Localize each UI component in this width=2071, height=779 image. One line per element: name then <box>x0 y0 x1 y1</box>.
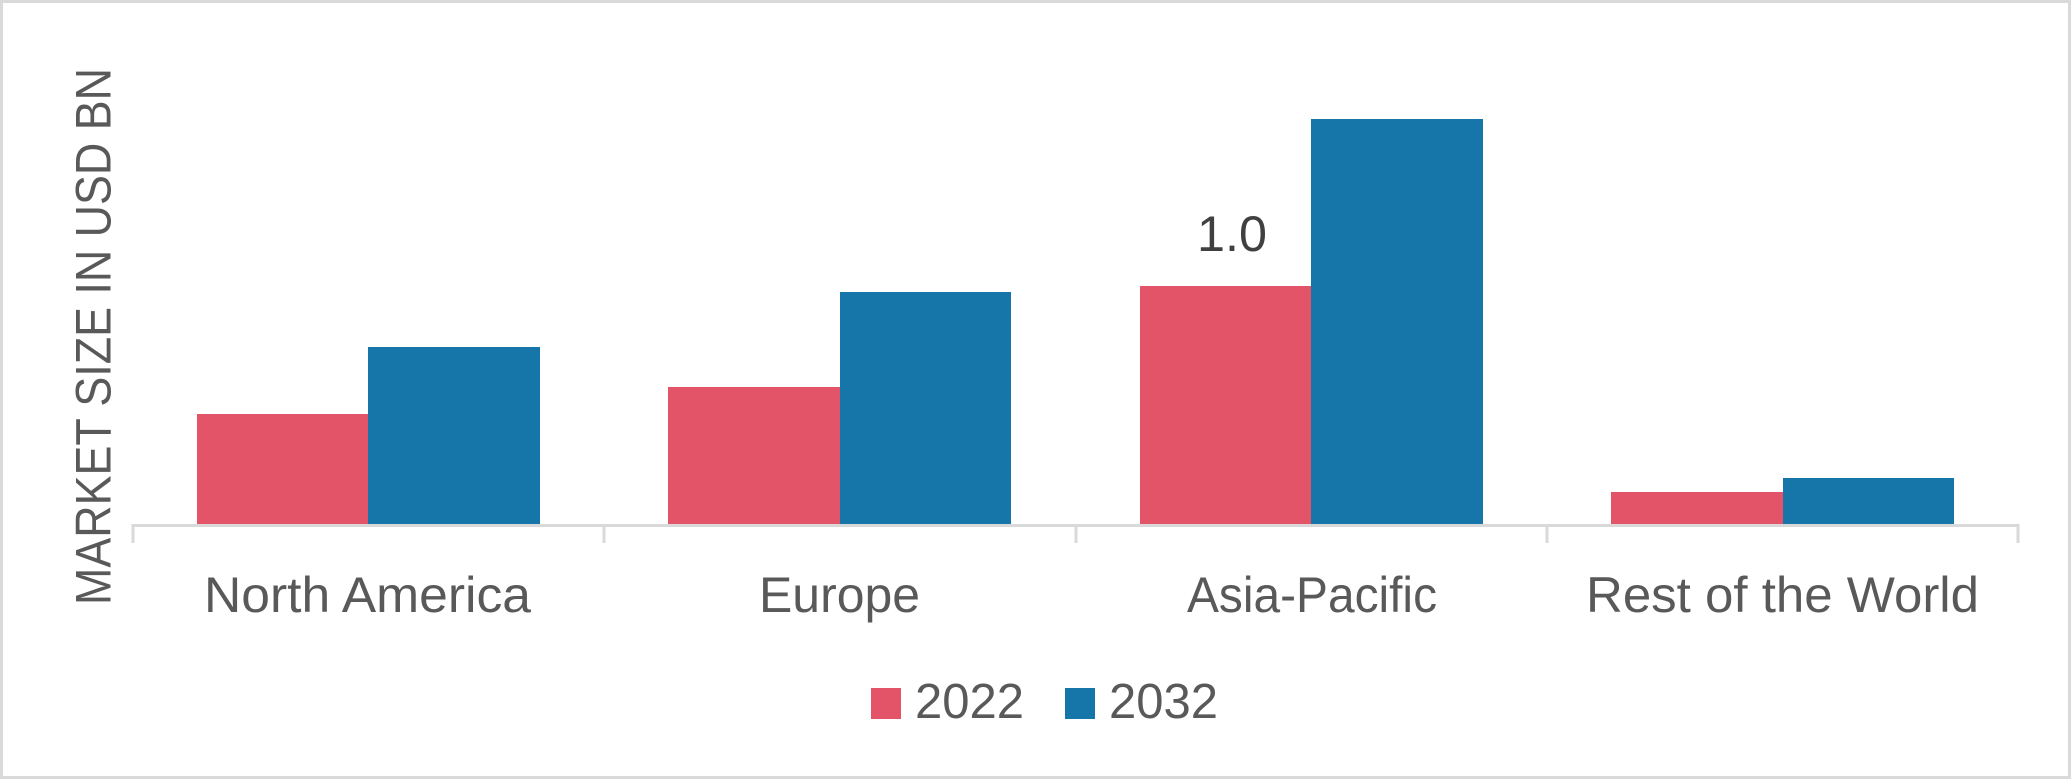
bar: Rest of the World 2022 <box>1611 492 1783 525</box>
x axis with tick marks <box>133 524 2018 543</box>
bar: Asia-Pacific 2022 <box>1140 286 1311 525</box>
bars: Asia-Pacific <box>1140 119 1483 525</box>
label: Rest of the World: Rest of the World <box>1586 567 1979 623</box>
label: Asia-Pacific: Asia-Pacific <box>1187 567 1437 623</box>
legend label: 2022: 2022 <box>915 675 1024 729</box>
bar: Rest of the World 2032 <box>1783 478 1954 525</box>
bars: Europe <box>668 292 1011 525</box>
bar: Europe 2022 <box>668 387 840 525</box>
bar: Europe 2032 <box>840 292 1011 525</box>
data label: Asia-Pacific 2022 value: 1.0 <box>1197 206 1267 262</box>
bar: Asia-Pacific 2032 <box>1311 119 1483 525</box>
bar: North America 2032 <box>368 347 540 525</box>
bar: North America 2022 <box>197 414 368 525</box>
legend swatch: 2032 <box>1065 688 1095 719</box>
legend <box>871 675 1218 729</box>
y-axis title: MARKET SIZE IN USD BN <box>65 68 121 605</box>
label: North America: North America <box>204 567 531 623</box>
legend label: 2032: 2032 <box>1109 675 1218 729</box>
bars: Rest of the World <box>1611 478 1954 525</box>
legend swatch: 2022 <box>871 688 901 719</box>
label: Europe: Europe <box>759 567 920 623</box>
x-axis labels <box>204 567 1979 623</box>
bars: North America <box>197 347 540 525</box>
